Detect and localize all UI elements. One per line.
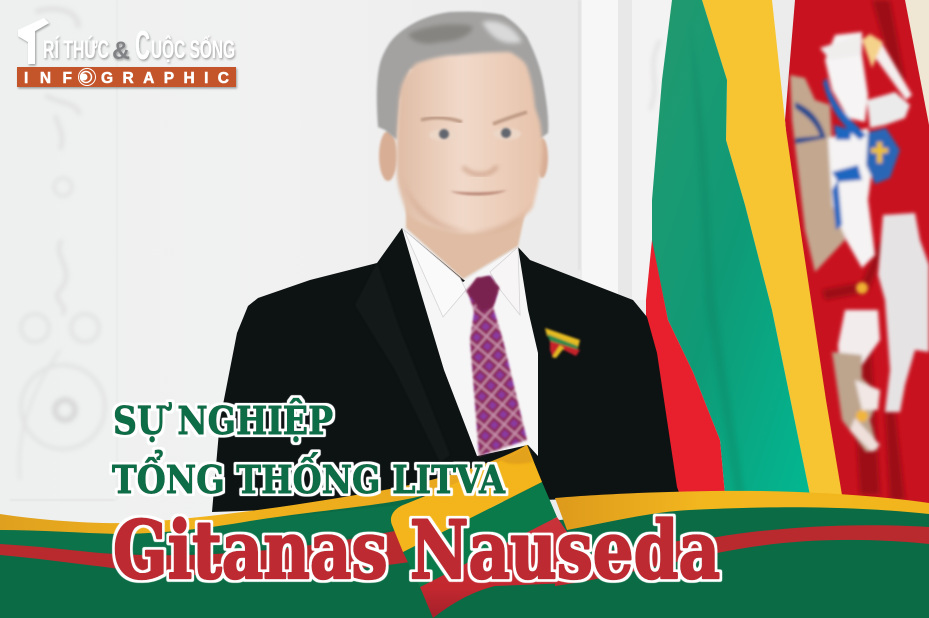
logo target icon	[78, 68, 96, 86]
jacket	[212, 228, 680, 512]
ribbon fold yellow	[391, 445, 542, 552]
ears	[379, 131, 397, 181]
lithuanian shield	[866, 128, 900, 184]
neck	[406, 190, 530, 279]
upper green band left	[0, 505, 400, 553]
mouth	[450, 190, 507, 195]
logo	[17, 18, 236, 87]
subtitle line two: TỔNG THỐNG LITVA	[112, 451, 505, 502]
ribbon fold red	[420, 517, 600, 618]
lapel shading	[355, 263, 450, 462]
necktie	[466, 276, 527, 456]
ribbon fold green	[403, 482, 557, 587]
logo big C: C	[135, 22, 150, 68]
logo big T	[18, 18, 49, 64]
logo text right: UỘC SỐNG	[151, 34, 235, 64]
left red stripe	[0, 530, 410, 575]
face	[397, 52, 542, 233]
logo ampersand: &	[112, 37, 130, 65]
green base	[0, 495, 929, 618]
hair	[377, 12, 548, 140]
subtitle line one: SỰ NGHIỆP	[113, 398, 333, 443]
state flag with knight	[785, 0, 929, 510]
logo infographic label end: GRAPHIC	[101, 70, 229, 87]
national flag of Lithuania	[646, 0, 842, 495]
portrait of president	[212, 12, 680, 512]
knight tan figure	[790, 75, 845, 272]
nose	[463, 166, 497, 174]
right gold band	[555, 491, 929, 530]
right red stripe	[555, 525, 929, 586]
logo infographic label: INF	[24, 70, 72, 87]
eyes and brows	[421, 112, 527, 141]
lapel pin ribbon	[545, 328, 580, 358]
logo text left: RÍ THỨC	[43, 34, 109, 64]
main title name: Gitanas Nauseda	[113, 503, 720, 597]
shirt and collar	[402, 228, 538, 456]
ribbon banner	[0, 445, 929, 618]
logo infographic bar	[17, 67, 236, 87]
left gold band	[0, 445, 530, 534]
